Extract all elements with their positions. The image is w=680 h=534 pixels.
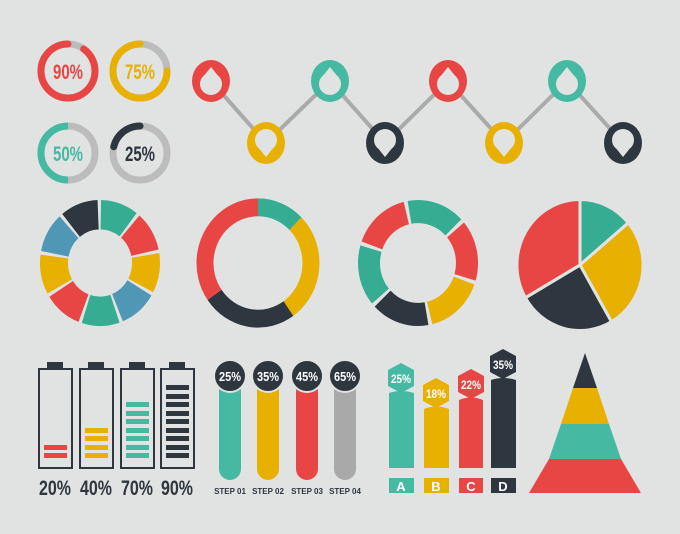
- donut chart 4 segments: [183, 184, 333, 342]
- node red 2: [429, 60, 467, 102]
- pie chart: [517, 199, 643, 331]
- node yellow 1: [247, 122, 285, 164]
- bar C: 22%: [461, 378, 481, 392]
- petal ring chart: [35, 195, 165, 331]
- battery 90%: [161, 362, 194, 500]
- progress ring 90%: 90%: [53, 61, 83, 84]
- pyramid: [529, 353, 641, 493]
- step 01: STEP 01: [214, 487, 246, 496]
- battery 40%: [80, 362, 113, 500]
- progress ring 25%: [113, 126, 167, 180]
- step 02: 35%: [257, 369, 279, 384]
- step 02: [252, 360, 284, 496]
- step 03: [291, 360, 323, 496]
- battery 70%: [121, 362, 154, 500]
- bar A: [388, 363, 414, 494]
- bar C: C: [466, 479, 476, 494]
- step 03: 45%: [296, 369, 318, 384]
- bar A: 25%: [391, 372, 411, 386]
- battery 20%: 20%: [39, 477, 71, 500]
- battery 90%: 90%: [161, 477, 193, 500]
- bar D: [490, 349, 516, 494]
- bar A: A: [396, 479, 406, 494]
- node teal 1: [311, 60, 349, 102]
- segmented donut: [349, 191, 487, 335]
- bar D: D: [498, 479, 508, 494]
- bar B: B: [431, 479, 441, 494]
- progress ring 75%: 75%: [125, 61, 155, 84]
- node dark 2: [604, 122, 642, 164]
- step 04: 65%: [334, 369, 356, 384]
- progress ring 90%: [41, 44, 95, 98]
- node red 1: [192, 60, 230, 102]
- node dark 1: [366, 122, 404, 164]
- progress ring 75%: [113, 44, 167, 98]
- bar B: 18%: [426, 387, 446, 401]
- timeline zigzag: [192, 60, 642, 164]
- node teal 2: [548, 60, 586, 102]
- progress ring 50%: [41, 126, 95, 180]
- bar D: 35%: [493, 358, 513, 372]
- progress ring 25%: 25%: [125, 143, 155, 166]
- step 03: STEP 03: [291, 487, 323, 496]
- node yellow 2: [485, 122, 523, 164]
- bar C: [458, 369, 484, 494]
- step 01: 25%: [219, 369, 241, 384]
- progress ring 50%: 50%: [53, 143, 83, 166]
- step 04: [329, 360, 361, 496]
- bar B: [423, 378, 449, 494]
- battery 20%: [39, 362, 72, 500]
- battery 40%: 40%: [80, 477, 112, 500]
- step 02: STEP 02: [252, 487, 284, 496]
- battery 70%: 70%: [121, 477, 153, 500]
- step 04: STEP 04: [329, 487, 361, 496]
- step 01: [214, 360, 246, 496]
